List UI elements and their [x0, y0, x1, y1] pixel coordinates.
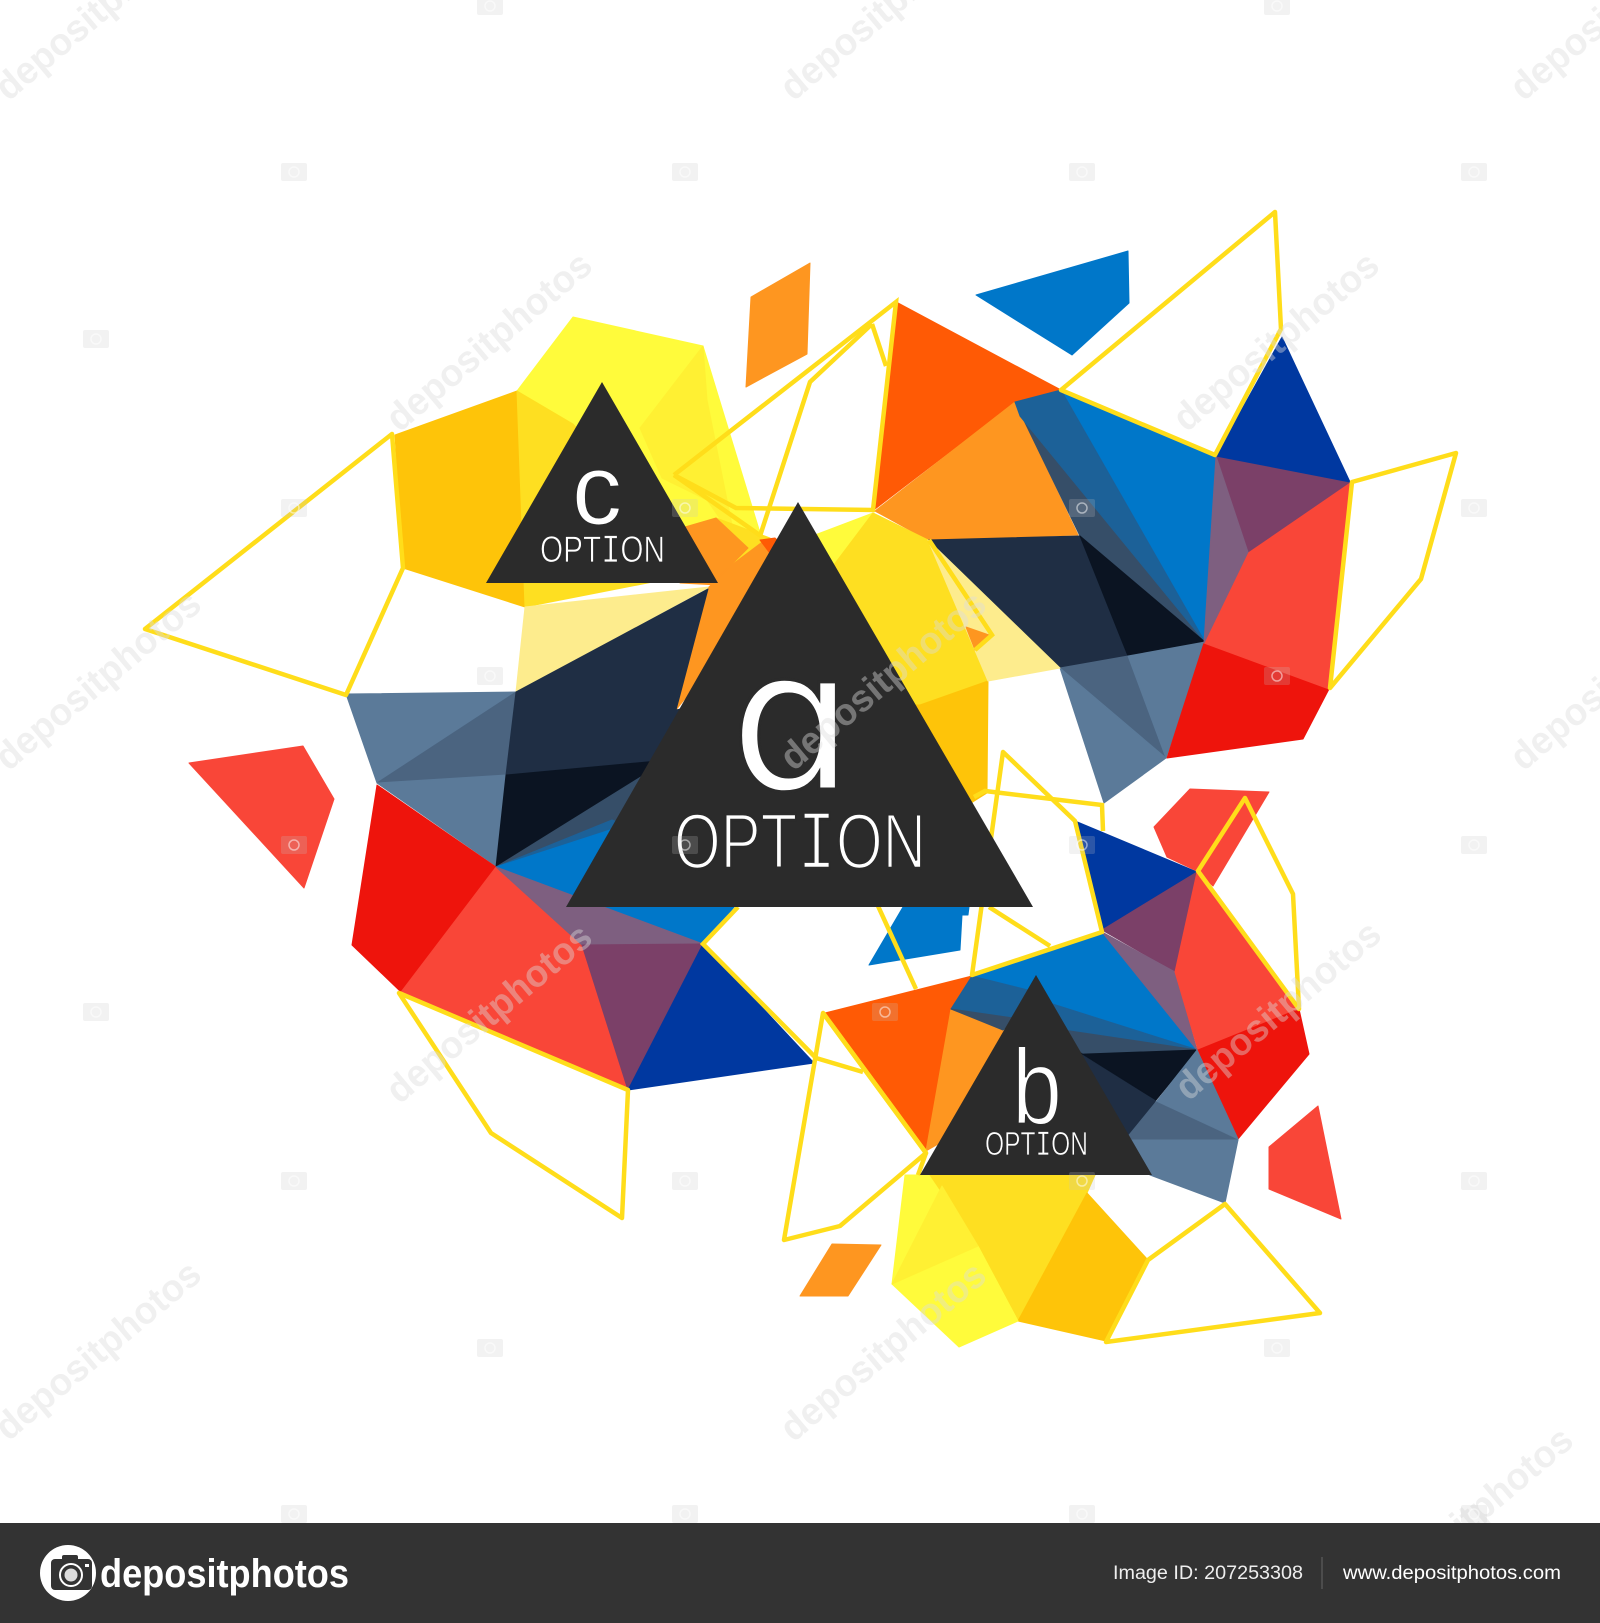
floating shard: orange bottom [800, 1244, 881, 1296]
watermark text: depositphotos [1167, 913, 1389, 1109]
polygon cluster: centre yellow facets [815, 513, 1060, 810]
polygon cluster: top right blue and navy facets [928, 390, 1216, 803]
polygon cluster: bottom yellow facets [892, 1175, 1148, 1347]
floating shard: red right upper [1154, 789, 1269, 886]
polygon cluster: top right orange facets [875, 303, 1078, 540]
yellow wireframe outlines [145, 212, 1456, 1342]
site url: www.depositphotos.com [1342, 1563, 1561, 1584]
triangle b with label: b [1012, 1026, 1062, 1147]
logo wordmark: depositphotos [100, 1552, 349, 1596]
triangle a with label: ɑ [730, 608, 854, 836]
polygon cluster: top right red and purple facets [1167, 337, 1350, 758]
polygon cluster: bottom right blue and orange facets [825, 933, 1198, 1151]
floating shard: red left [189, 746, 334, 888]
triangle b with label [920, 975, 1152, 1175]
polygon cluster: bottom right red, purple and slate facets [1075, 821, 1309, 1203]
polygon cluster: left slate and navy facets [346, 589, 760, 944]
triangle a with label [566, 502, 1033, 907]
watermark text: depositphotos [1359, 1419, 1581, 1615]
watermark text: depositphotos [378, 916, 600, 1112]
polygon cluster: left yellow facets [395, 317, 770, 692]
floating shard: red right lower [1269, 1106, 1341, 1219]
triangle c with label [486, 382, 718, 583]
floating shard: blue centre [869, 907, 969, 965]
triangle c with label: OPTION [540, 529, 665, 575]
triangle c with label: c [572, 434, 622, 546]
watermark text: depositphotos [772, 583, 994, 779]
watermark text: depositphotos [378, 244, 600, 440]
polygon cluster: left orange facets [676, 518, 795, 710]
floating shard: orange top [746, 263, 810, 387]
watermark text: depositphotos [1165, 244, 1387, 440]
image id: Image ID: 207253308 [1113, 1563, 1303, 1584]
triangle b with label: OPTION [985, 1125, 1088, 1166]
watermark text: depositphotos [772, 1254, 994, 1450]
footer bar [0, 1523, 1600, 1623]
icon: camera logo [40, 1545, 96, 1601]
polygon cluster: left red and purple facets [352, 785, 814, 1090]
triangle a with label: OPTION [674, 797, 926, 894]
floating shard: blue top [976, 251, 1129, 355]
